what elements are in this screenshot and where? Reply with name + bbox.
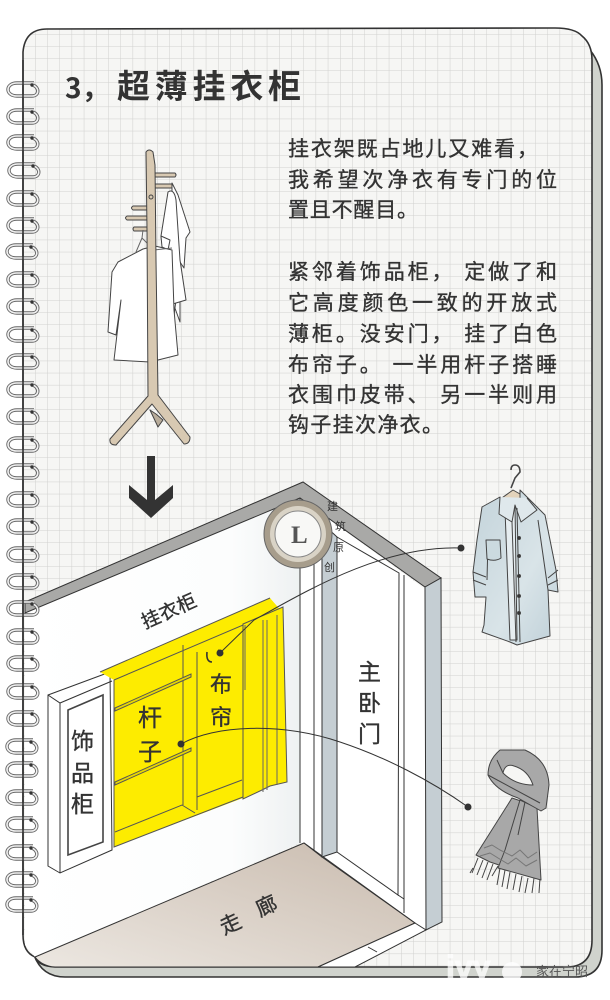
label: rod: 杆 (138, 705, 162, 732)
label: ornament cabinet (71, 728, 94, 817)
label: curtain: 帘 (210, 705, 232, 730)
label: corridor (216, 892, 281, 940)
top slab (25, 482, 441, 613)
door area (300, 498, 426, 930)
label: wardrobe: 挂衣柜 (138, 590, 200, 634)
label: corridor: 廊 (252, 892, 281, 922)
watermark: 家在宁昭 (536, 964, 588, 979)
label: master bedroom door: 主 (358, 659, 381, 685)
label: corridor: 走 (216, 910, 245, 940)
label: rod: 子 (138, 739, 162, 766)
arrow down (129, 456, 173, 518)
body text: second paragraph: 薄柜。没安门， 挂了白色 (288, 323, 557, 346)
right door jamb (425, 578, 442, 930)
callout: coat (217, 545, 464, 656)
label: ornament cabinet: 柜 (71, 791, 94, 817)
wall (25, 498, 300, 957)
spiral binding rings (7, 83, 39, 911)
body text: second paragraph: 紧邻着饰品柜， 定做了和 (288, 261, 557, 284)
watermark credit: 建 (327, 499, 338, 513)
illustration: blue shirt on hanger (473, 465, 558, 645)
label: master bedroom door: 门 (358, 721, 381, 747)
watermark credit: 创 (324, 561, 335, 574)
curtain (243, 607, 287, 799)
body text: second paragraph (288, 261, 557, 437)
body text: second paragraph: 钩子挂次净衣。 (288, 414, 443, 437)
label: curtain (210, 672, 232, 730)
body text: second paragraph: 衣围巾皮带、 另一半则用 (288, 384, 557, 407)
label: ornament cabinet: 饰 (71, 728, 94, 754)
watermark credit: 筑 (335, 519, 346, 533)
label: ornament cabinet: 品 (71, 760, 94, 786)
title: 3， (65, 67, 110, 107)
callout: scarf (178, 728, 471, 810)
badge: clock logo (264, 500, 332, 568)
watermark (446, 949, 588, 985)
label: rod (138, 705, 162, 766)
watermark credit (324, 499, 346, 574)
door frame and panel (322, 523, 337, 857)
threshold strip (318, 923, 426, 967)
label: curtain: 布 (210, 672, 232, 697)
title: 超薄挂衣柜 (117, 60, 301, 108)
watermark credit: 原 (333, 542, 344, 554)
ornament cabinet (48, 672, 112, 873)
label: master bedroom door (358, 659, 381, 747)
body text: first paragraph: 挂衣架既占地儿又难看， (288, 138, 538, 161)
illustration: room (25, 482, 442, 967)
yellow wardrobe (100, 598, 287, 847)
floor (35, 843, 415, 967)
watermark: ivy (446, 949, 491, 985)
badge: clock logo: L (291, 522, 308, 549)
body text: first paragraph (288, 138, 557, 222)
illustration: grey scarf (470, 750, 549, 893)
body text: first paragraph: 置且不醒目。 (288, 199, 418, 222)
illustration: coat rack with clothes (108, 150, 190, 445)
body text: first paragraph: 我希望次净衣有专门的位 (288, 169, 557, 192)
body text: second paragraph: 它高度颜色一致的开放式 (288, 292, 557, 315)
body text: second paragraph: 布帘子。 一半用杆子搭睡 (288, 354, 557, 377)
label: master bedroom door: 卧 (358, 690, 381, 716)
